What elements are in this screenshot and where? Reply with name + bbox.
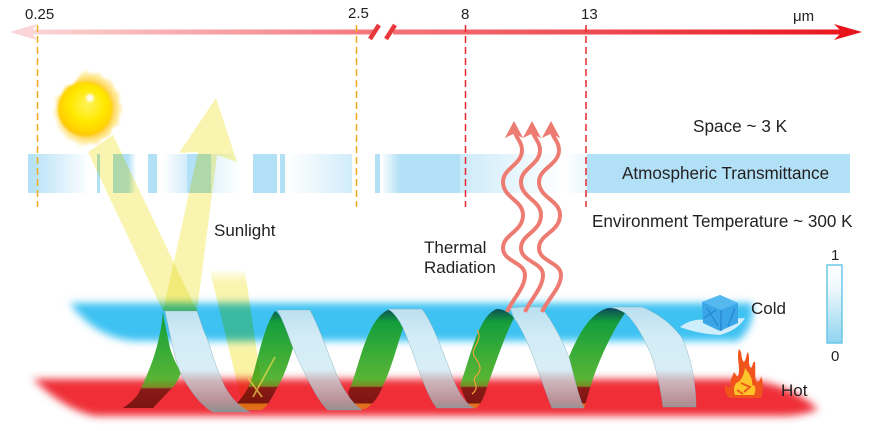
flame icon bbox=[725, 349, 763, 398]
sunlight reflected arrow bbox=[163, 98, 237, 311]
axis break mark bbox=[370, 25, 395, 39]
sunlight beam incoming bbox=[88, 135, 197, 311]
colour scale bar bbox=[827, 247, 842, 365]
axis tick labels: 13 bbox=[581, 6, 598, 23]
internal thermal wave bbox=[472, 330, 480, 394]
thermal radiation wavy arrows bbox=[503, 122, 561, 312]
axis tick labels: μm bbox=[793, 8, 814, 25]
wavelength axis arrow bbox=[10, 24, 862, 40]
label: thermal radiation: Thermal bbox=[424, 238, 486, 257]
ice cube icon bbox=[680, 295, 745, 335]
axis tick labels: 0.25 bbox=[25, 6, 54, 23]
atmospheric transmittance band bbox=[28, 154, 850, 193]
sun icon bbox=[52, 69, 124, 148]
wavelength dashed guide lines bbox=[38, 25, 586, 207]
small reflected light rays bbox=[248, 357, 275, 397]
helix back faces: green and dark red bbox=[123, 308, 625, 410]
label: atmospheric transmittance: Atmospheric Transmittance bbox=[622, 164, 829, 183]
label: space temperature: Space ~ 3 K bbox=[693, 116, 788, 136]
helix front ribbon faces bbox=[165, 307, 696, 412]
colour scale bar: 1 bbox=[831, 247, 839, 264]
colour scale bar: 0 bbox=[831, 348, 839, 365]
axis tick labels: 2.5 bbox=[348, 5, 369, 22]
label: cold: Cold bbox=[751, 299, 786, 318]
label: environment temperature: Environment Temperature ~ 300 K bbox=[592, 212, 853, 231]
label: thermal radiation: Radiation bbox=[424, 258, 496, 277]
axis tick labels: 8 bbox=[461, 6, 469, 23]
label: hot: Hot bbox=[781, 381, 808, 400]
axis tick labels bbox=[25, 5, 814, 25]
hot red band bbox=[33, 379, 818, 416]
label: sunlight: Sunlight bbox=[214, 221, 276, 240]
cold blue band bbox=[70, 303, 753, 341]
sunlight transmitted beam bbox=[210, 271, 265, 407]
